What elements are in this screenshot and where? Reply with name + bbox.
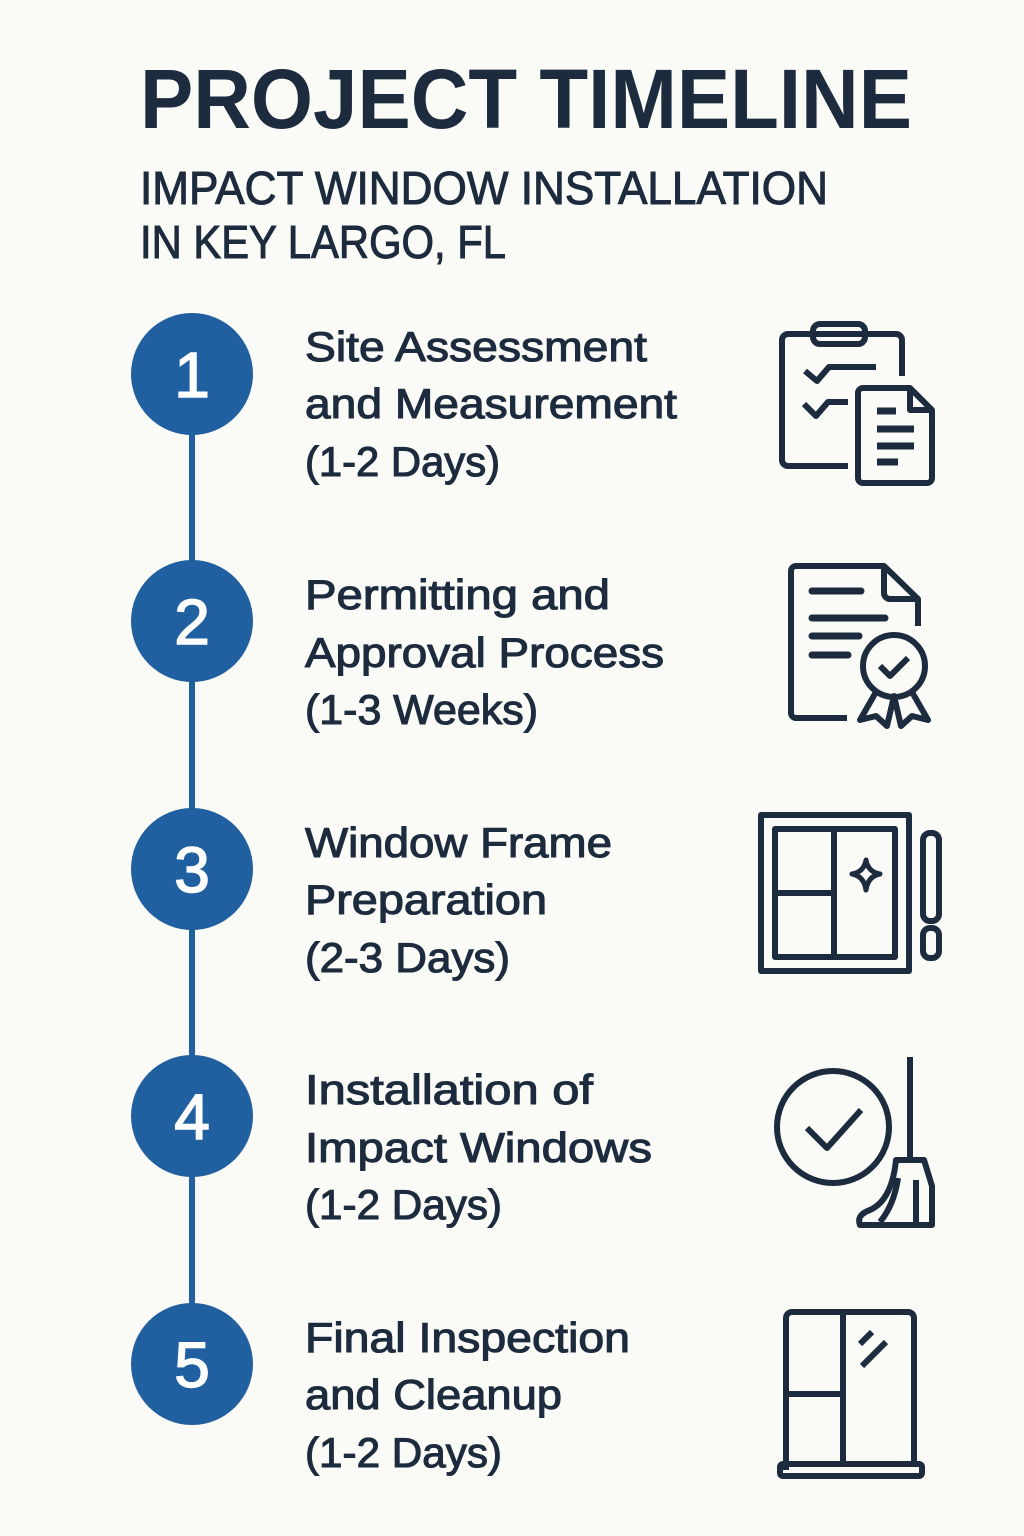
step texts: (1-3 Weeks) (305, 686, 538, 733)
step texts: (2-3 Days) (305, 934, 510, 981)
subtitle: IN KEY LARGO, FL (140, 216, 506, 268)
step texts (305, 323, 677, 1476)
step texts: Permitting and (305, 571, 610, 618)
icon: window frame (761, 815, 939, 971)
step texts: Site Assessment (305, 323, 647, 370)
icon: finished window (780, 1312, 922, 1476)
subtitle (140, 162, 828, 268)
step texts: Final Inspection (305, 1314, 630, 1361)
title: PROJECT TIMELINE (140, 52, 912, 146)
icon: certificate (791, 566, 928, 726)
step texts: (1-2 Days) (305, 1181, 502, 1228)
icon: clipboard (782, 324, 932, 483)
icon: check and broom (777, 1057, 932, 1225)
step texts: Impact Windows (305, 1124, 652, 1171)
step markers: 3 (174, 834, 210, 906)
step markers: 1 (174, 339, 210, 411)
step texts: Installation of (305, 1066, 593, 1113)
step texts: and Cleanup (305, 1371, 562, 1418)
timeline line (189, 374, 195, 1364)
step markers: 5 (174, 1329, 210, 1401)
subtitle: IMPACT WINDOW INSTALLATION (140, 162, 828, 214)
step markers (131, 313, 253, 1425)
step markers: 2 (174, 586, 210, 658)
step texts: Approval Process (305, 629, 664, 676)
step markers: 4 (174, 1081, 210, 1153)
step texts: (1-2 Days) (305, 438, 500, 485)
step texts: Preparation (305, 876, 547, 923)
step texts: (1-2 Days) (305, 1429, 502, 1476)
step texts: and Measurement (305, 380, 677, 427)
step texts: Window Frame (305, 819, 612, 866)
